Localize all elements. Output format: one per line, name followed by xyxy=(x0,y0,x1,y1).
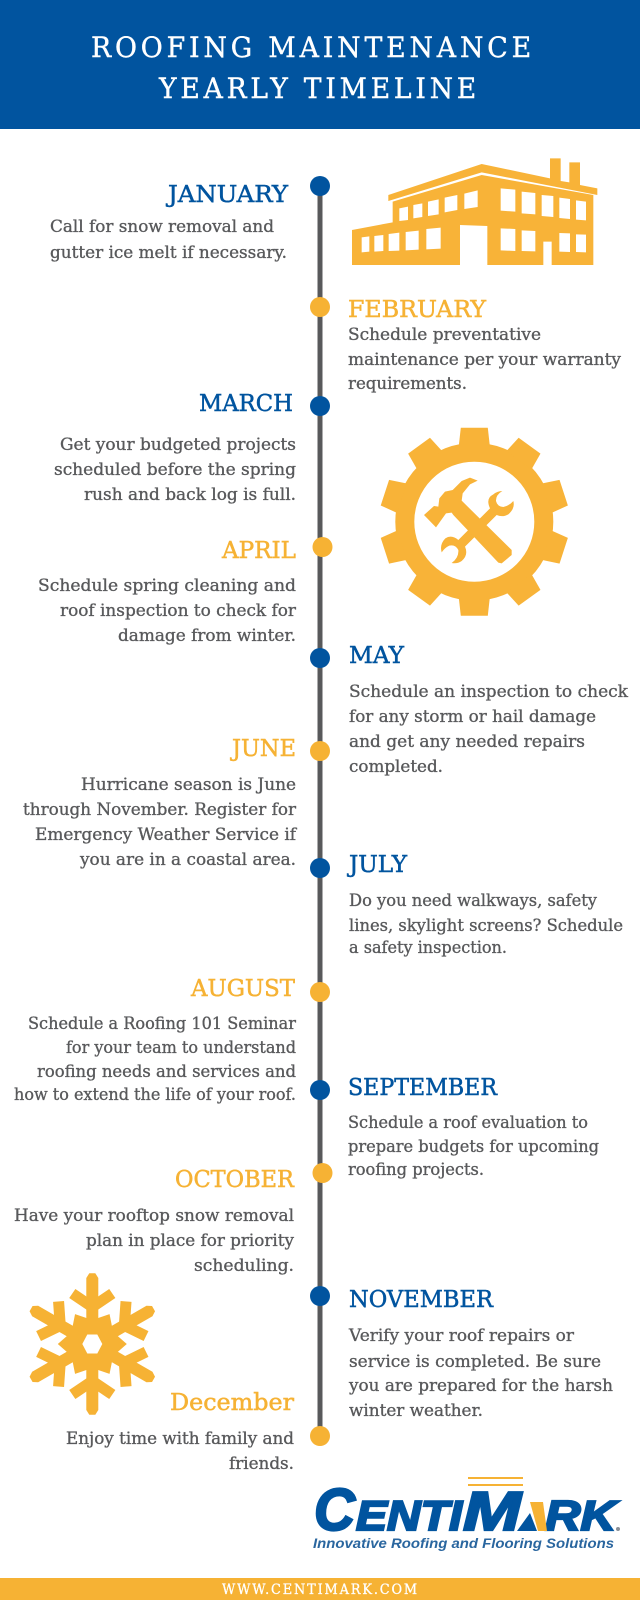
text: August xyxy=(14,1014,297,1105)
text: July xyxy=(349,891,623,958)
month: June xyxy=(23,736,298,870)
logo: CentiMark xyxy=(313,1477,620,1551)
month: April xyxy=(38,538,297,646)
text: May: for any storm or hail damage xyxy=(349,707,596,727)
timeline spine xyxy=(318,186,322,1436)
text: March: Get your budgeted projects xyxy=(60,435,296,455)
text: October xyxy=(14,1206,294,1276)
logo tagline: Innovative Roofing and Flooring Solutions xyxy=(313,1535,614,1551)
icon: building xyxy=(352,158,597,265)
text: August: for your team to understand xyxy=(66,1038,296,1058)
text: February: requirements. xyxy=(348,374,467,394)
month: September xyxy=(348,1075,599,1180)
text: October: plan in place for priority xyxy=(86,1231,294,1251)
text: September: roofing projects. xyxy=(348,1160,484,1180)
logo: CentiMark: RK xyxy=(545,1492,619,1539)
text: March: rush and back log is full. xyxy=(84,485,296,505)
month: February xyxy=(348,297,621,394)
month: May xyxy=(349,643,629,777)
text: February: maintenance per your warranty xyxy=(348,350,621,370)
text: April: roof inspection to check for xyxy=(60,601,297,621)
logo: CentiMark: C xyxy=(314,1477,356,1543)
timeline dots xyxy=(310,176,332,1446)
text: November: you are prepared for the harsh xyxy=(348,1376,613,1396)
footer bar xyxy=(0,1578,640,1600)
text: June: through November. Register for xyxy=(23,800,297,820)
text: July: a safety inspection. xyxy=(349,938,507,958)
text: October: Have your rooftop snow removal xyxy=(14,1206,294,1226)
heading: December: December xyxy=(170,1390,294,1416)
month: March xyxy=(54,391,296,505)
heading: November: NOVEMBER xyxy=(349,1287,494,1313)
text: April: Schedule spring cleaning and xyxy=(38,576,296,596)
heading: September: SEPTEMBER xyxy=(348,1075,498,1101)
month: July xyxy=(347,852,623,958)
text: December: friends. xyxy=(229,1454,294,1474)
text: November: service is completed. Be sure xyxy=(349,1352,601,1372)
text: June: Emergency Weather Service if xyxy=(35,825,298,845)
text: May: Schedule an inspection to check xyxy=(349,682,629,702)
text: August: Schedule a Roofing 101 Seminar xyxy=(28,1014,297,1034)
text: November xyxy=(348,1326,613,1421)
text: October: scheduling. xyxy=(194,1256,294,1276)
text: February: Schedule preventative xyxy=(348,325,541,345)
text: April xyxy=(38,576,297,646)
icon: gear with hammer and wrench xyxy=(380,428,568,616)
header banner xyxy=(0,0,640,129)
month: November xyxy=(348,1287,613,1421)
heading: October: OCTOBER xyxy=(175,1167,295,1193)
logo: CentiMark: ENTI xyxy=(356,1492,463,1539)
heading: February: FEBRUARY xyxy=(348,297,487,323)
text: April: damage from winter. xyxy=(118,626,296,646)
logo: CentiMark: M xyxy=(463,1480,522,1542)
heading: April: APRIL xyxy=(221,538,296,564)
text: September: prepare budgets for upcoming xyxy=(348,1137,599,1157)
text: July: Do you need walkways, safety xyxy=(349,891,597,911)
text: May: completed. xyxy=(349,757,443,777)
text: November: winter weather. xyxy=(349,1401,483,1421)
text: September xyxy=(348,1113,599,1180)
text: January: Call for snow removal and xyxy=(50,217,274,237)
month: December xyxy=(66,1390,294,1474)
text: December xyxy=(66,1429,294,1474)
text: December: Enjoy time with family and xyxy=(66,1429,294,1449)
text: January xyxy=(50,217,287,263)
text: September: Schedule a roof evaluation to xyxy=(348,1113,588,1133)
title: ROOFING MAINTENANCE xyxy=(91,31,535,64)
text: August: how to extend the life of your roof. xyxy=(14,1085,296,1105)
month: October xyxy=(14,1167,295,1276)
text: August: roofing needs and services and xyxy=(37,1062,296,1082)
month: August xyxy=(14,976,297,1105)
title: YEARLY TIMELINE xyxy=(158,72,480,105)
heading: January: JANUARY xyxy=(166,182,289,208)
text: May: and get any needed repairs xyxy=(349,732,585,752)
text: January: gutter ice melt if necessary. xyxy=(50,243,287,263)
text: July: lines, skylight screens? Schedule xyxy=(349,916,623,936)
text: June xyxy=(23,775,298,870)
heading: July: JULY xyxy=(347,852,408,878)
text: March: scheduled before the spring xyxy=(54,460,296,480)
heading: March: MARCH xyxy=(199,391,293,417)
text: May xyxy=(349,682,629,777)
text: November: Verify your roof repairs or xyxy=(348,1326,575,1346)
footer url: WWW.CENTIMARK.COM xyxy=(222,1582,419,1598)
text: February xyxy=(348,325,621,394)
heading: June: JUNE xyxy=(230,736,296,762)
heading: May: MAY xyxy=(349,643,405,669)
text: June: Hurricane season is June xyxy=(81,775,296,795)
heading: August: AUGUST xyxy=(190,976,296,1002)
icon: snowflake xyxy=(21,1273,164,1415)
text: June: you are in a coastal area. xyxy=(79,850,296,870)
month: January xyxy=(50,182,289,263)
text: March xyxy=(54,435,296,505)
title xyxy=(91,31,535,105)
